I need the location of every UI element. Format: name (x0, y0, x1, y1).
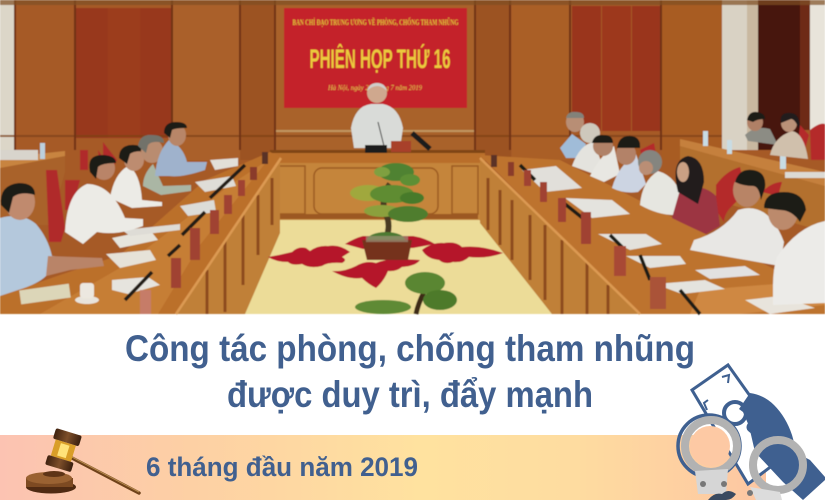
hand (739, 393, 825, 500)
delegate white cap (572, 123, 602, 174)
chain (708, 491, 736, 500)
delegate far left (0, 183, 104, 296)
side table right (680, 131, 825, 232)
red banner (284, 8, 467, 108)
carpet (243, 218, 552, 314)
red banner: PHIÊN HỌP THỨ 16 (310, 43, 450, 74)
bottom gradient band (0, 435, 766, 500)
delegate white shirt three (590, 135, 620, 182)
delegate blue shirt (155, 122, 207, 176)
delegate white shirt right edge (764, 192, 825, 305)
left handcuff (678, 415, 740, 494)
red chairs left (46, 142, 117, 242)
right table front panels (480, 157, 640, 314)
period subtitle: 6 tháng đầu năm 2019 (146, 452, 418, 482)
head table front (270, 150, 485, 220)
right handcuff (747, 440, 803, 500)
back right delegates (745, 112, 808, 159)
side table left (0, 143, 65, 225)
delegate blue white shirt (612, 136, 646, 192)
meeting room photo (0, 0, 825, 314)
banknote (692, 365, 790, 484)
left table top (0, 152, 282, 314)
icon: hand with banknote and handcuffs (678, 365, 825, 500)
delegates right side (560, 112, 825, 305)
delegate blue grey hair (560, 112, 586, 158)
red chairs right (640, 124, 825, 222)
rug pattern (268, 236, 503, 288)
wood wall (0, 0, 825, 314)
speaker (351, 83, 430, 153)
right table top (480, 155, 825, 314)
delegate grey hair white shirt (638, 150, 682, 215)
small bonsai (355, 272, 457, 314)
delegate white shirt (65, 155, 143, 244)
red banner: BAN CHỈ ĐẠO TRUNG ƯƠNG VỀ PHÒNG, CHỐNG THAM NHŨNG (292, 17, 459, 27)
delegate red jacket (672, 156, 720, 234)
left table front panels (173, 157, 280, 314)
title line two: được duy trì, đẩy mạnh (227, 374, 593, 415)
delegates left side (0, 122, 207, 296)
red banner: Hà Nội, ngày 28 tháng 7 năm 2019 (327, 83, 422, 92)
bonsai tree (350, 163, 428, 260)
title line one: Công tác phòng, chống tham nhũng (125, 328, 695, 369)
delegate grey hair (138, 135, 191, 195)
delegate second white shirt (110, 145, 162, 208)
delegate white shirt front (690, 170, 784, 266)
icon: gavel (26, 428, 139, 494)
